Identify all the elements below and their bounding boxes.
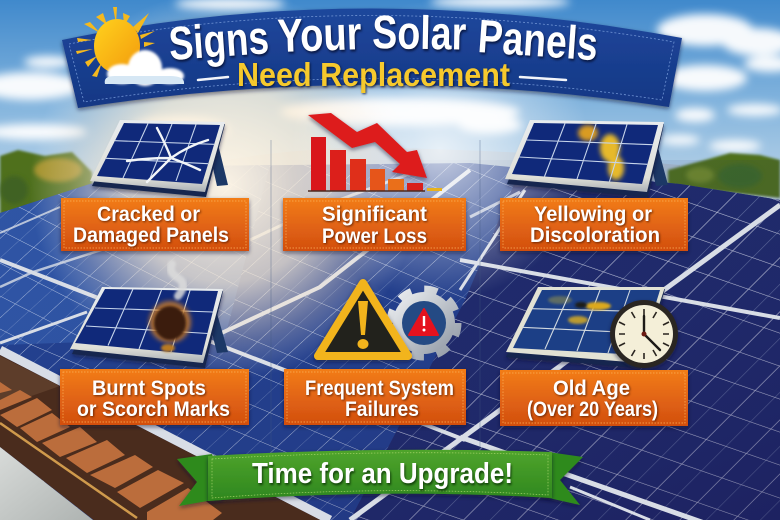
title ribbon — [62, 5, 682, 108]
label box — [500, 198, 688, 251]
icon: burnt solar panel — [70, 287, 228, 368]
label box: Power Loss — [322, 225, 427, 248]
icon: yellowed solar panel — [505, 120, 668, 197]
label box: Damaged Panels — [73, 224, 229, 247]
label box — [500, 370, 688, 426]
icon: clock — [610, 300, 678, 368]
background: distant hills — [200, 148, 680, 190]
label box — [283, 198, 466, 251]
heading: Need Replacement: Need Replacement — [237, 56, 510, 93]
heading: Signs Your Solar Panels: Signs — [167, 10, 270, 70]
label box: Discoloration — [530, 224, 660, 247]
panel: old age — [500, 287, 688, 426]
panel: cracked or damaged — [61, 120, 249, 251]
label box — [61, 198, 249, 251]
panel: burnt spots — [60, 264, 249, 425]
heading: Signs Your Solar Panels: Your — [276, 6, 362, 62]
panel: system failures — [284, 283, 466, 425]
label box: Failures — [345, 398, 419, 421]
icon: aged solar panel — [506, 287, 665, 368]
label box: (Over 20 Years) — [527, 398, 658, 421]
label box: Old Age — [553, 377, 630, 400]
label box: Cracked or — [97, 203, 200, 226]
footer ribbon: time for an upgrade — [177, 450, 583, 506]
icon: sun and cloud — [76, 7, 184, 86]
slogan text: Time for an Upgrade! — [252, 458, 513, 490]
panel: power loss — [283, 113, 466, 251]
heading: Signs Your Solar Panels — [167, 5, 600, 70]
icon: smoke — [171, 264, 183, 296]
background: tree lines — [0, 150, 780, 216]
divider lines — [271, 140, 480, 470]
chart: falling power bars — [308, 113, 442, 191]
heading: Signs Your Solar Panels: Panels — [476, 9, 600, 70]
icon: gear with red alert — [390, 289, 458, 357]
heading: Signs Your Solar Panels: Solar — [372, 5, 467, 60]
label box: Yellowing or — [534, 203, 652, 226]
icon: cracked solar panel — [90, 120, 228, 197]
label box — [284, 369, 466, 425]
background: sky — [0, 0, 780, 240]
background: roof tiles and gutter — [0, 355, 330, 520]
panel: yellowing — [500, 120, 688, 251]
icon: falling arrow — [308, 113, 427, 178]
label box: Burnt Spots — [92, 377, 206, 400]
icon: warning triangle — [318, 283, 408, 356]
label box: Frequent System — [305, 377, 454, 400]
label box: Significant — [322, 203, 427, 226]
label box: or Scorch Marks — [77, 398, 230, 421]
label box — [60, 369, 249, 425]
